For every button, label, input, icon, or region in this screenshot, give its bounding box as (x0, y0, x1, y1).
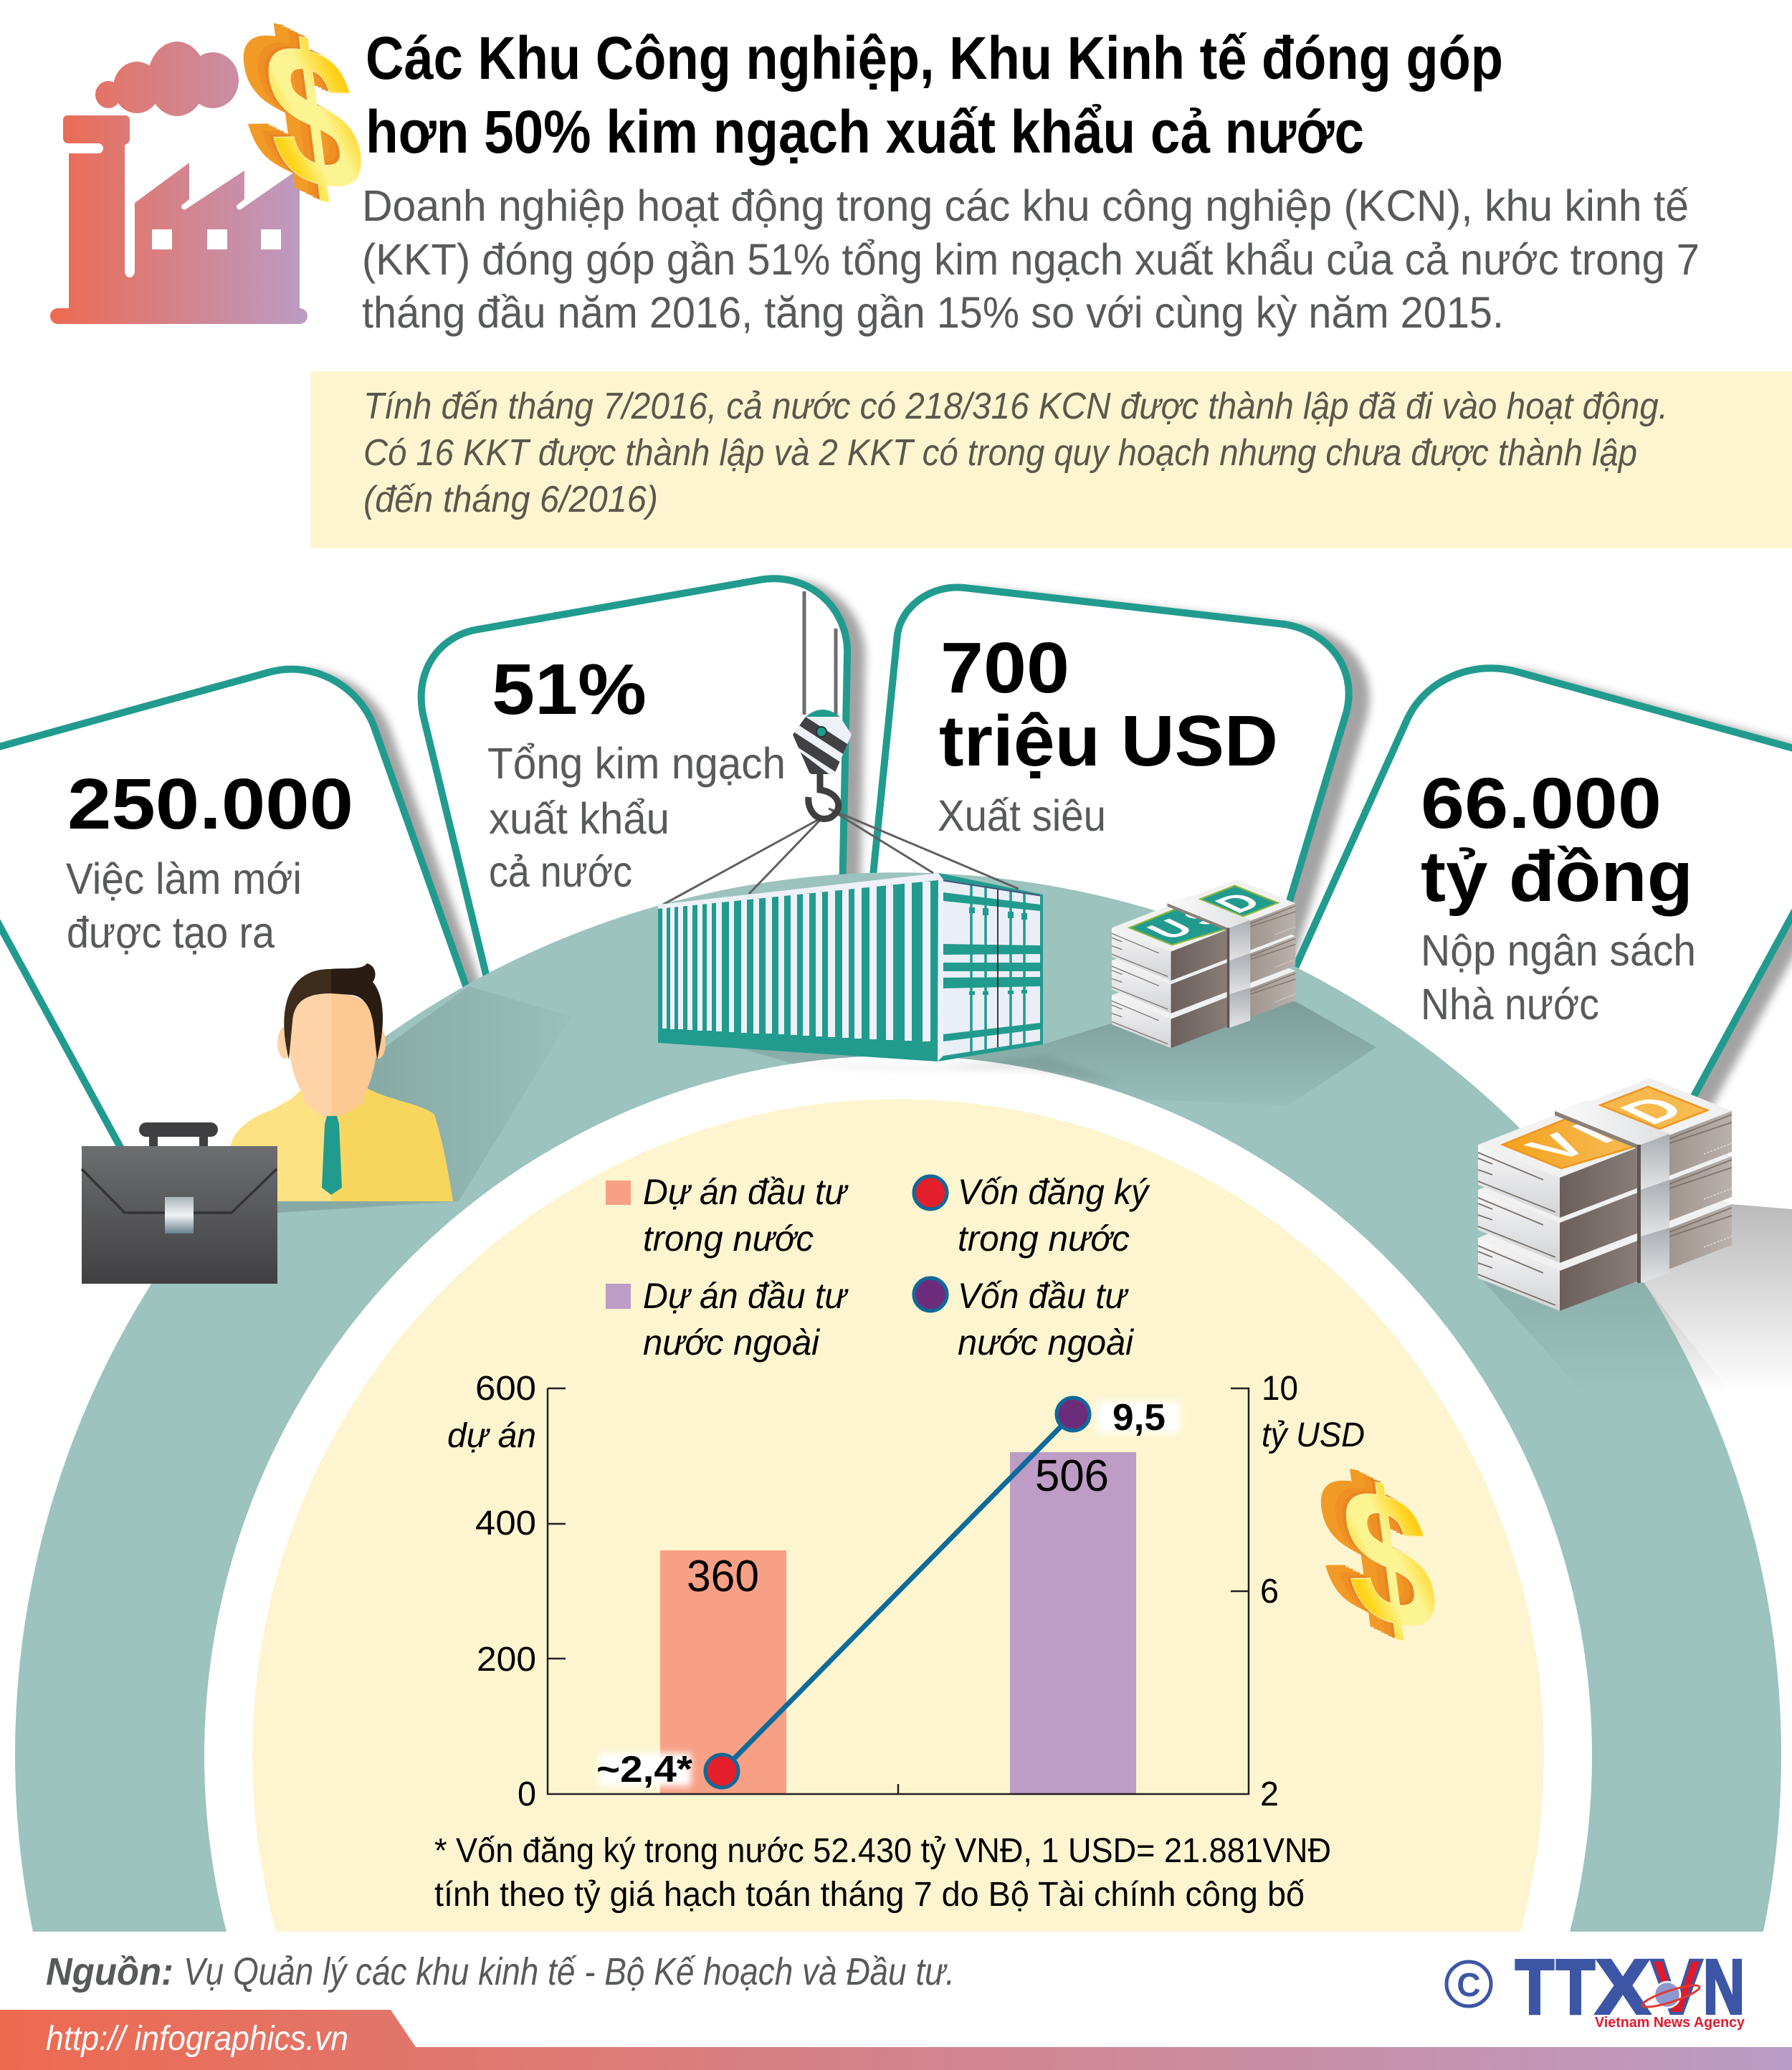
icon: factory with smoke (50, 42, 308, 324)
bar: domestic projects: 360 (687, 1552, 759, 1601)
copyright mark: C (1457, 1966, 1481, 2003)
footnote: tính theo tỷ giá hạch toán tháng 7 do Bộ Tài chính công bố (434, 1876, 1305, 1914)
bar: domestic projects (660, 1550, 786, 1794)
stat: state budget: tỷ đồng (1421, 836, 1693, 917)
shirt (230, 1086, 453, 1201)
hair (284, 963, 383, 1059)
footnote (434, 1832, 1331, 1914)
stat label: cả nước (489, 847, 632, 896)
footnote: * Vốn đăng ký trong nước 52.430 tỷ VNĐ, 1 USD= 21.881VNĐ (434, 1832, 1331, 1870)
banknote faces (1502, 1087, 1707, 1168)
manager shadow (277, 986, 571, 1213)
wordmark: T (1515, 1943, 1554, 2030)
panel: state budget callout bubble (1276, 668, 1792, 1218)
ears (277, 1027, 386, 1059)
icon: crane hook and ropes (663, 591, 1019, 905)
chart legend (606, 1172, 1150, 1363)
intro paragraph: (KKT) đóng góp gần 51% tổng kim ngạch xuất khẩu của cả nước trong 7 (362, 235, 1700, 284)
left axis labels (447, 1370, 536, 1813)
intro paragraph (362, 181, 1700, 337)
panel: trade surplus callout bubble (867, 587, 1349, 960)
stat label (1421, 926, 1696, 1029)
source line: Vụ Quản lý các khu kinh tế - Bộ Kế hoạch và Đầu tư. (184, 1950, 955, 1993)
bar: foreign projects: 506 (1035, 1451, 1109, 1501)
line series (722, 1414, 1073, 1771)
right axis labels: tỷ USD (1262, 1416, 1365, 1454)
right axis labels: 10 (1262, 1370, 1298, 1408)
website url: http:// infographics.vn (46, 2020, 348, 2058)
handle (139, 1122, 218, 1146)
note text (363, 386, 1668, 520)
smoke cloud (95, 42, 239, 116)
stat: trade surplus: triệu USD (939, 701, 1278, 781)
footer ribbon (0, 2010, 1792, 2070)
bar: foreign projects (1010, 1451, 1136, 1794)
soft shadow under container (781, 1055, 1118, 1082)
title (366, 24, 1503, 166)
right axis labels (1260, 1370, 1365, 1813)
icon: chart dollar sign: $ (1331, 1443, 1447, 1676)
stat label: được tạo ra (67, 908, 275, 957)
container and USD stack shadow (738, 1001, 1376, 1105)
combo chart (447, 1370, 1365, 1813)
globe (1641, 1981, 1701, 2011)
stat label: xuất khẩu (489, 794, 669, 843)
wordmark: T (1556, 1943, 1595, 2030)
stat label: Nhà nước (1421, 980, 1599, 1029)
right axis labels: 6 (1260, 1573, 1279, 1611)
wordmark: N (1703, 1943, 1745, 2030)
clasp (165, 1197, 194, 1234)
legend: foreign capital: nước ngoài (958, 1322, 1135, 1363)
stat label (487, 739, 786, 896)
banknote label: VND (1513, 1086, 1710, 1167)
legend: domestic registered capital: Vốn đăng ký (958, 1172, 1150, 1212)
title: hơn 50% kim ngạch xuất khẩu cả nước (366, 98, 1364, 166)
panel: highlighted note (310, 371, 1792, 548)
left axis labels: 400 (475, 1504, 536, 1542)
shadow behind VN banknote stack (1644, 1204, 1792, 1398)
legend: foreign projects (606, 1276, 849, 1363)
factory windows (152, 229, 281, 249)
banknote faces (1130, 886, 1278, 945)
note text: Tính đến tháng 7/2016, cả nước có 218/316 KCN được thành lập đã đi vào hoạt động. (363, 386, 1668, 427)
left axis labels: dự án (447, 1417, 536, 1455)
arch: white middle band (204, 1056, 1592, 1932)
legend: domestic registered capital: trong nước (958, 1218, 1130, 1259)
icon: gold dollar sign: $ (253, 0, 374, 239)
left axis labels: 200 (477, 1641, 536, 1679)
legend: domestic projects (606, 1172, 849, 1259)
stat: state budget (1421, 763, 1696, 1029)
legend: foreign projects: Dự án đầu tư (643, 1276, 849, 1316)
note text: Có 16 KKT được thành lập và 2 KKT có trong quy hoạch nhưng chưa được thành lập (363, 432, 1637, 474)
tie (322, 1116, 342, 1195)
legend: foreign projects: nước ngoài (643, 1322, 821, 1363)
panel: export share callout bubble (421, 578, 847, 1039)
stat: export share: 51% (492, 649, 647, 730)
hook (809, 774, 839, 819)
icon: USD banknote stack (1112, 879, 1295, 1048)
cables (804, 591, 836, 715)
stat: jobs (66, 764, 353, 957)
stat label: Nộp ngân sách (1421, 926, 1696, 975)
face (290, 993, 377, 1118)
case body (82, 1146, 277, 1284)
point: domestic capital: ~2,4* (596, 1749, 693, 1790)
panel: jobs callout bubble (0, 669, 487, 1294)
legend: foreign capital: Vốn đầu tư (958, 1276, 1129, 1316)
arch: teal outer band (15, 872, 1781, 1932)
left axis labels: 600 (475, 1370, 536, 1408)
intro paragraph: Doanh nghiệp hoạt động trong các khu công nghiệp (KCN), khu kinh tế (362, 181, 1689, 230)
stat label (66, 854, 302, 957)
point: foreign capital (1057, 1397, 1180, 1439)
left axis labels: 0 (518, 1775, 536, 1813)
factory silhouette (50, 115, 308, 324)
lifting ropes (663, 809, 1019, 905)
wordmark (1515, 1943, 1745, 2030)
door face (938, 873, 1043, 1062)
pulley block (806, 710, 840, 717)
legend: domestic registered capital (914, 1172, 1150, 1259)
copyright mark (1447, 1962, 1491, 2006)
logo: TTXVN (1447, 1943, 1745, 2031)
stat: trade surplus (938, 628, 1278, 840)
legend: foreign capital (914, 1276, 1135, 1363)
point: foreign capital: 9,5 (1112, 1397, 1166, 1439)
stat label: Việc làm mới (66, 854, 302, 903)
side face (658, 873, 938, 1062)
arch: cream chart background (252, 1099, 1544, 1932)
icon: VND banknote stack (1478, 1078, 1732, 1311)
icon: manager figure (230, 963, 453, 1201)
VN stack shadow on arch (1484, 1282, 1735, 1398)
stat: export share (487, 649, 786, 896)
source line: Nguồn: (46, 1950, 173, 1993)
stat: jobs: 250.000 (67, 764, 353, 844)
stat label: Tổng kim ngạch (487, 739, 786, 788)
wordmark: X (1596, 1943, 1650, 2030)
stat: state budget: 66.000 (1421, 763, 1662, 844)
agency name: Vietnam News Agency (1595, 2015, 1745, 2031)
banknote label: USD (1136, 884, 1279, 944)
legend: domestic projects: trong nước (643, 1218, 814, 1259)
intro paragraph: tháng đầu năm 2016, tăng gần 15% so với cùng kỳ năm 2015. (362, 288, 1504, 337)
icon: briefcase (82, 1122, 277, 1284)
legend: domestic projects: Dự án đầu tư (643, 1172, 849, 1212)
stat label: Xuất siêu (938, 791, 1106, 840)
icon: shipping container (658, 873, 1043, 1062)
title: Các Khu Công nghiệp, Khu Kinh tế đóng góp (366, 24, 1503, 92)
wordmark: V (1651, 1943, 1702, 2030)
point: domestic capital (596, 1749, 738, 1790)
note text: (đến tháng 6/2016) (363, 479, 658, 520)
right axis labels: 2 (1260, 1775, 1279, 1813)
stat: trade surplus: 700 (940, 628, 1069, 708)
